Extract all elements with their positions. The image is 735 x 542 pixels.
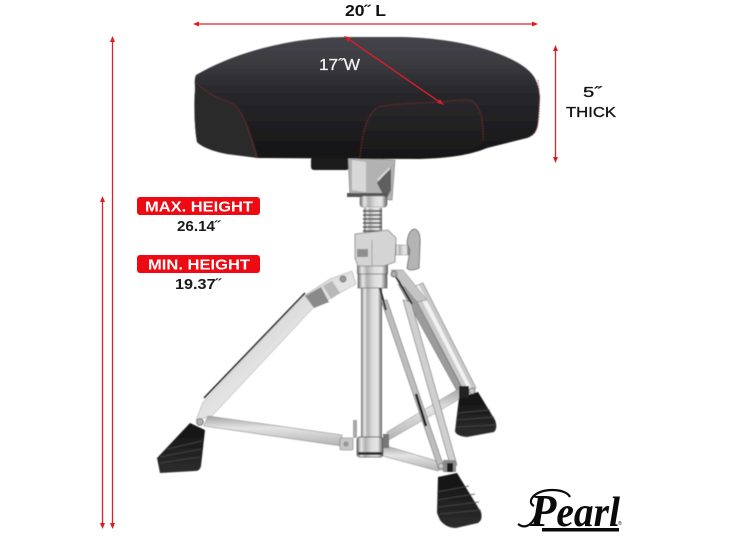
front strut — [383, 445, 440, 471]
seat mount — [347, 158, 395, 207]
logo: Pearl: Pearl — [529, 485, 620, 536]
seat knob — [311, 157, 349, 170]
arrow: maximum height — [110, 36, 115, 529]
height clamp with wing bolt — [355, 229, 420, 270]
label: seat thickness — [566, 84, 616, 121]
callout: minimum height: 19.37˝ — [175, 277, 222, 293]
front braces — [379, 275, 457, 472]
centre column — [361, 270, 382, 440]
label: seat thickness: 5˝ — [583, 84, 602, 101]
threaded spindle — [363, 208, 382, 234]
label: seat length: 20˝ L — [345, 3, 386, 20]
front nose shading — [360, 100, 484, 159]
callout: maximum height — [137, 197, 260, 235]
arrow: seat length — [193, 22, 538, 26]
red stitching — [197, 80, 540, 158]
callout: maximum height: 26.14˝ — [177, 219, 221, 235]
arrow: seat width — [344, 36, 444, 105]
base collar — [340, 420, 389, 457]
left leg — [196, 271, 356, 425]
logo: Pearl: ® — [618, 520, 622, 527]
arrow: seat thickness — [553, 45, 558, 163]
front foot — [437, 473, 482, 528]
rear right leg — [398, 283, 476, 395]
padded seat — [194, 37, 540, 159]
arrow: minimum height — [100, 196, 105, 529]
left strut — [204, 416, 342, 446]
left foot — [157, 423, 205, 473]
left perforated side panel — [195, 80, 258, 158]
callout: minimum height: MIN. HEIGHT — [148, 256, 250, 274]
rear strut — [387, 388, 463, 441]
label: seat width: 17˝W — [319, 57, 360, 74]
callout: minimum height — [137, 255, 260, 293]
icon: drum throne stool — [157, 37, 540, 528]
upper leg joints — [340, 265, 427, 302]
callout: maximum height: MAX. HEIGHT — [145, 198, 253, 216]
label: seat thickness: THICK — [566, 104, 616, 121]
rear foot — [455, 386, 496, 437]
